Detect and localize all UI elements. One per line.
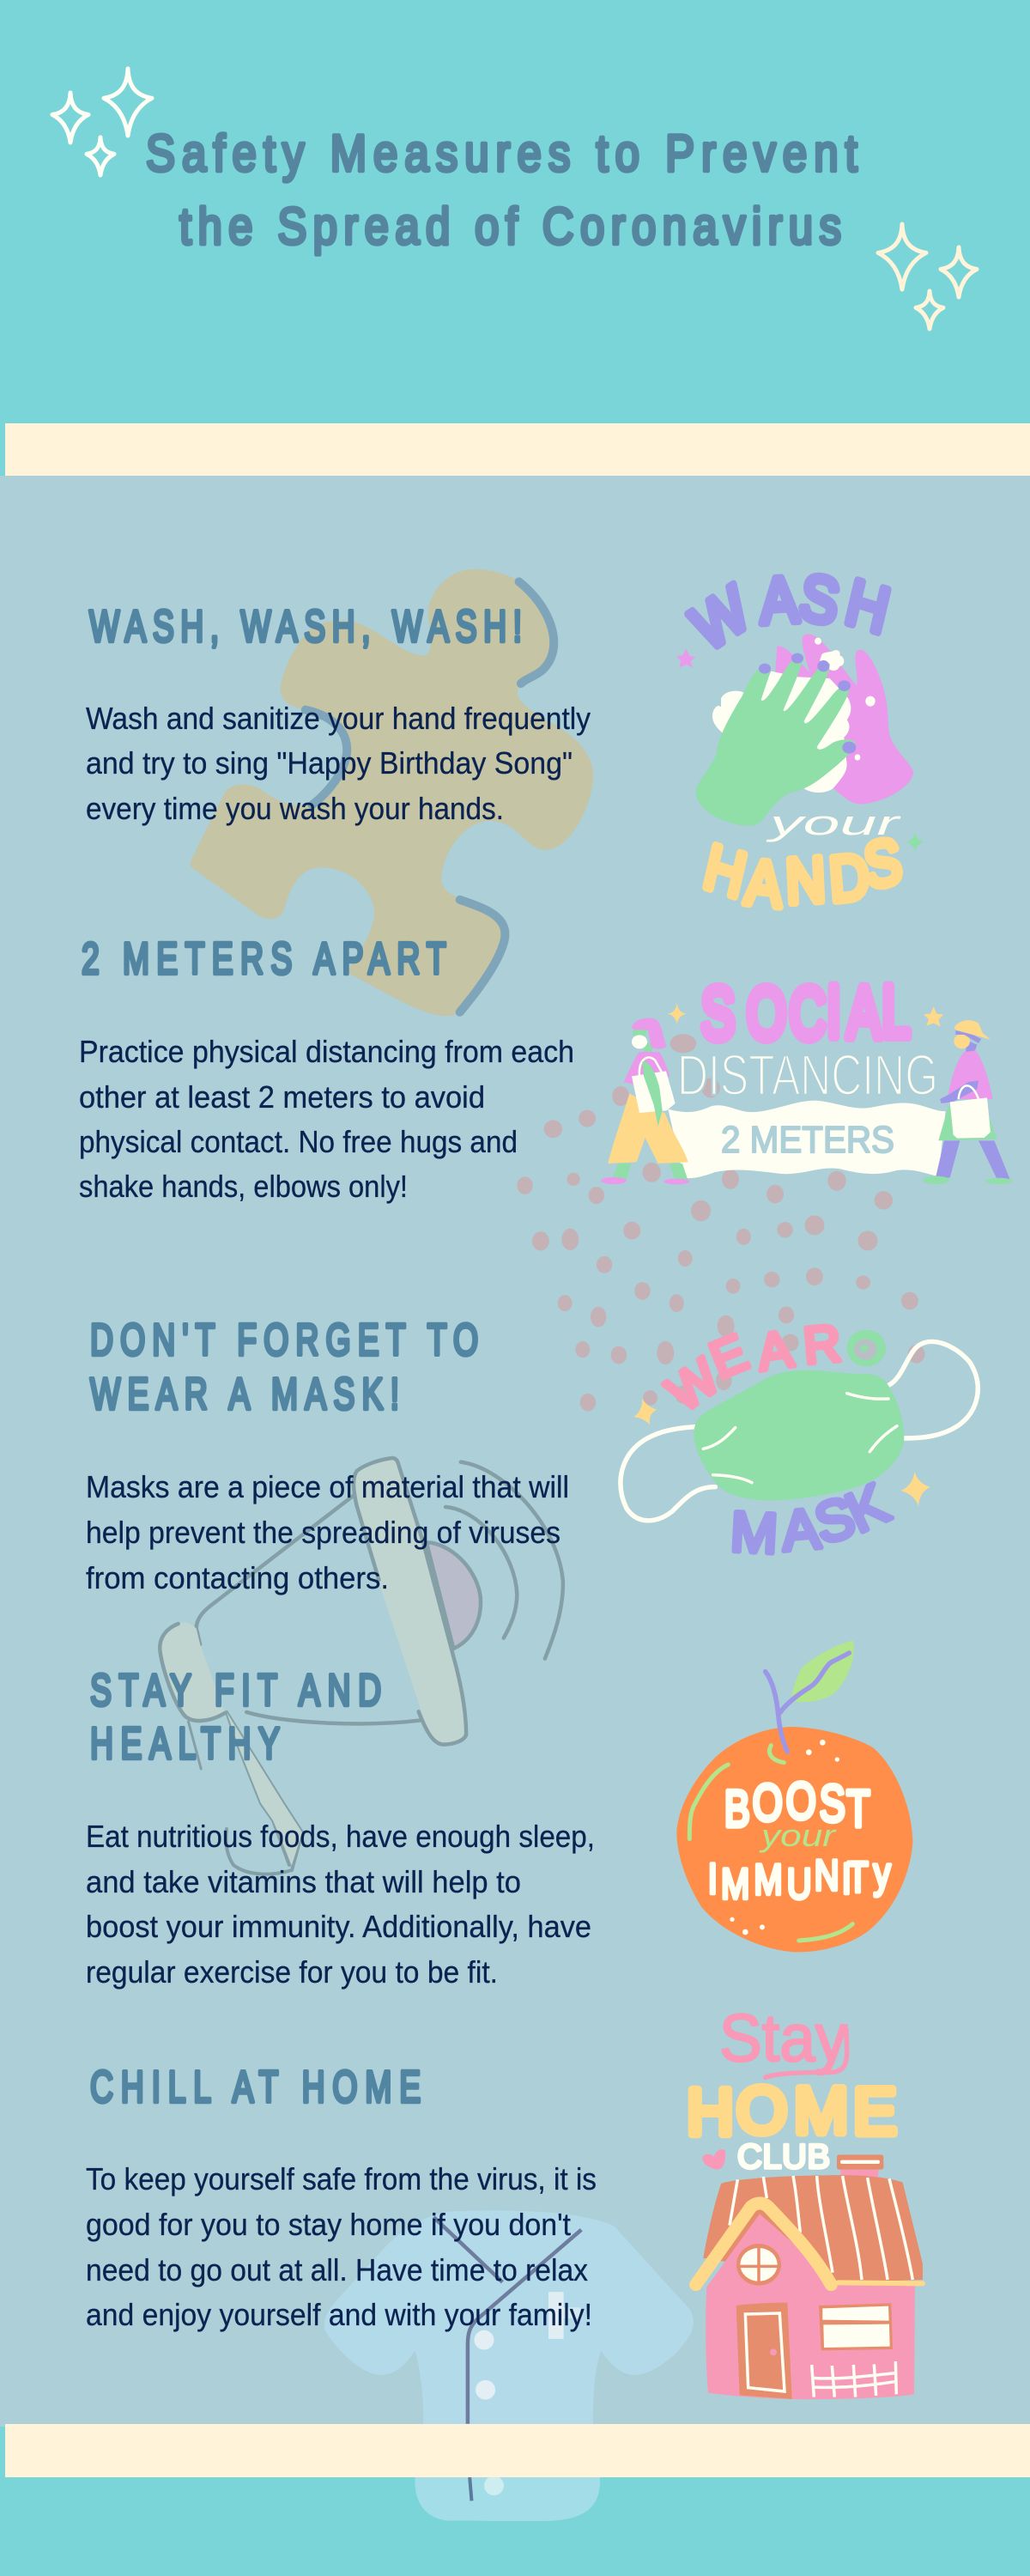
heading: home: CHILL AT HOME (90, 2062, 421, 2111)
body text: home (86, 2161, 597, 2332)
body text: mask (86, 1469, 569, 1595)
megaphone handle outline (226, 1712, 302, 1874)
yellow sparkle left (633, 1398, 657, 1425)
icon: washing hands (676, 635, 924, 853)
icon: pink star (676, 648, 695, 667)
body text: mask: from contacting others. (86, 1560, 389, 1595)
section: distance (79, 933, 574, 1204)
lettering: 2 METERS: 2 METERS (721, 1119, 894, 1161)
person right (923, 1020, 1013, 1184)
body text: home: and enjoy yourself and with your family! (86, 2297, 592, 2332)
person left (601, 1018, 689, 1184)
lettering: Stay: Stay (719, 2000, 847, 2075)
body text: home: To keep yourself safe from the virus, it is (86, 2161, 597, 2196)
section: fit (86, 1665, 595, 1990)
illustration: social distancing (601, 972, 1013, 1184)
body text: wash (86, 701, 591, 826)
body text: fit: regular exercise for you to be fit. (86, 1954, 498, 1990)
title: Safety Measures to Prevent (146, 125, 857, 182)
banner (668, 1101, 946, 1178)
ring centre (854, 1340, 877, 1360)
icon: house (696, 2029, 923, 2399)
green ring (847, 1330, 886, 1366)
title: the Spread of Coronavirus (179, 197, 841, 255)
ring inner mark (860, 1345, 868, 1352)
icon: white sparkles top left (52, 69, 152, 175)
title (146, 125, 857, 255)
heading: distance: 2 METERS APART (82, 933, 446, 983)
decorative megaphone (160, 1458, 563, 1874)
body text: fit: boost your immunity. Additionally, have (86, 1909, 591, 1944)
illustration: boost your immunity (676, 1641, 912, 1952)
lettering: MASK: MASK (729, 1471, 898, 1565)
lettering: CLUB: CLUB (737, 2138, 830, 2176)
body text: distance: shake hands, elbows only! (79, 1169, 408, 1204)
body text: distance: physical contact. No free hugs and (79, 1124, 518, 1159)
illustration: wash your hands (676, 560, 924, 920)
lettering: your: your (758, 1818, 837, 1853)
icon: orange fruit (676, 1641, 912, 1952)
lettering: SOCIAL: SOCIAL (701, 972, 910, 1054)
decorative shirt (324, 2210, 694, 2521)
icon: yellow star (924, 1006, 943, 1026)
body text: fit (86, 1819, 595, 1990)
body text: home: good for you to stay home if you don't (86, 2207, 571, 2242)
body text: wash: every time you wash your hands. (86, 791, 504, 826)
icon: yellow sparkle (668, 1003, 687, 1024)
lettering: WASH: WASH (682, 560, 896, 665)
lettering: HOME: HOME (687, 2075, 897, 2149)
heading: fit: HEALTHY (90, 1718, 280, 1768)
lettering: WEAR: WEAR (657, 1314, 843, 1423)
lettering: your: your (765, 805, 901, 842)
body text: distance: Practice physical distancing from each (79, 1034, 574, 1069)
lettering: DISTANCING: DISTANCING (677, 1043, 938, 1108)
decorative droplet dots (517, 1034, 925, 1412)
illustration: stay home club (687, 2000, 923, 2399)
heading: mask: DON'T FORGET TO (90, 1315, 478, 1364)
lettering: IMMUNITY: IMMUNITy (708, 1849, 891, 1908)
body text: mask: Masks are a piece of material that will (86, 1469, 569, 1504)
lettering: HANDS: HANDS (698, 825, 905, 920)
lettering: BOOST: BOOST (724, 1773, 870, 1838)
heading: mask (90, 1315, 478, 1419)
panel: slate content background (0, 476, 1030, 2427)
heading: wash: WASH, WASH, WASH! (89, 601, 522, 651)
heading: mask: WEAR A MASK! (90, 1369, 399, 1419)
heading: fit (90, 1665, 381, 1768)
body text: fit: Eat nutritious foods, have enough sleep, (86, 1819, 595, 1854)
section: mask (86, 1315, 569, 1595)
body text: mask: help prevent the spreading of viruses (86, 1515, 560, 1550)
icon: green sparkle (906, 832, 924, 853)
icon: heart (702, 2149, 725, 2170)
top cream band (5, 423, 1030, 476)
section: wash (86, 601, 591, 826)
body text: wash: Wash and sanitize your hand frequently (86, 701, 591, 736)
figures and banner (601, 1003, 1013, 1184)
heading: fit: STAY FIT AND (90, 1665, 381, 1715)
section: home (86, 2062, 597, 2332)
icon: face mask (621, 1330, 978, 1521)
underline swoosh of Stay (766, 2029, 847, 2077)
megaphone handle fill (227, 1712, 302, 1865)
body text: distance: other at least 2 meters to avoid (79, 1079, 485, 1115)
icon: cream sparkles top right (878, 224, 977, 329)
decorative jigsaw puzzle piece (191, 569, 593, 1016)
bottom cream band (5, 2424, 1030, 2477)
body text: fit: and take vitamins that will help to (86, 1864, 521, 1899)
megaphone body (160, 1458, 563, 1769)
body text: wash: and try to sing "Happy Birthday Song" (86, 745, 573, 781)
yellow sparkle right (900, 1471, 930, 1506)
body text: home: need to go out at all. Have time to relax (86, 2252, 588, 2287)
illustration: wear a mask (621, 1314, 978, 1565)
body text: distance (79, 1034, 574, 1204)
